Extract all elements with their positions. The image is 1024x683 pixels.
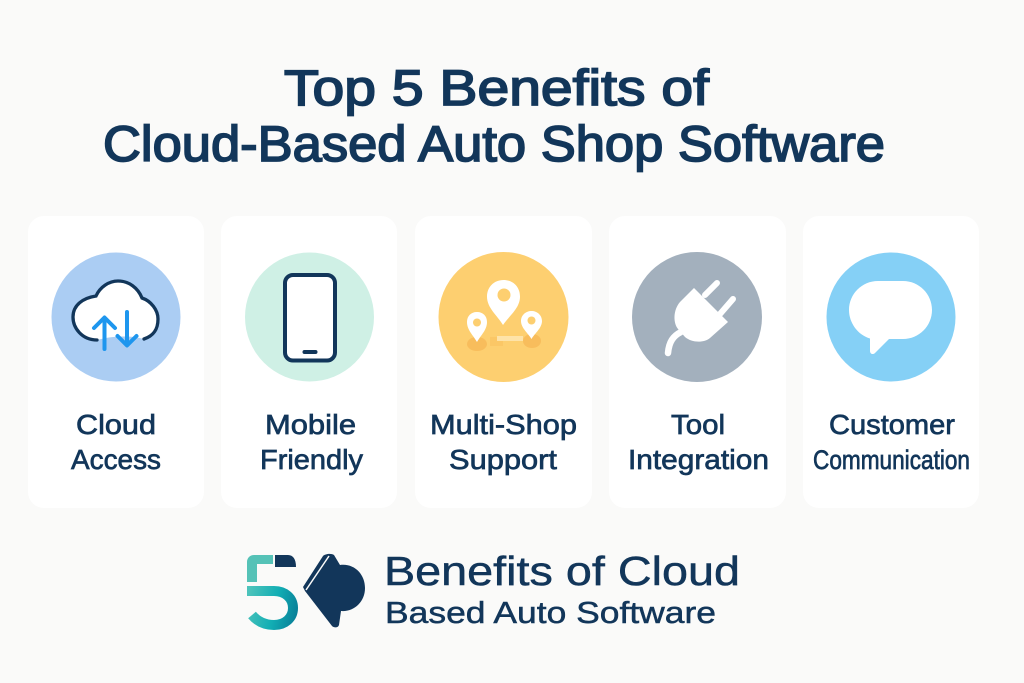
footer logo bbox=[247, 554, 365, 627]
icon: speech bubble bbox=[826, 252, 956, 382]
title bbox=[103, 60, 885, 172]
label: multi-shop support: Support bbox=[449, 444, 557, 475]
footer text: Benefits of Cloud bbox=[384, 548, 740, 594]
footer text: Based Auto Software bbox=[385, 595, 716, 630]
label: tool integration: Integration bbox=[628, 444, 769, 475]
label: cloud access bbox=[71, 409, 161, 475]
label: mobile friendly bbox=[260, 409, 363, 475]
label: mobile friendly: Mobile bbox=[265, 409, 356, 440]
label: cloud access: Access bbox=[71, 444, 161, 475]
panel: multi-shop support bbox=[415, 216, 592, 508]
label: cloud access: Cloud bbox=[76, 409, 156, 440]
label: multi-shop support bbox=[430, 409, 577, 475]
icon: cloud with arrows bbox=[52, 252, 180, 382]
panel: mobile friendly bbox=[221, 216, 397, 508]
icon: navy arrow hand bbox=[303, 554, 365, 627]
label: customer communication bbox=[813, 409, 970, 475]
icon: smartphone bbox=[245, 252, 374, 382]
icon: location pins bbox=[438, 252, 568, 382]
label: customer communication: Communication bbox=[813, 445, 970, 475]
title: Top 5 Benefits of bbox=[284, 60, 709, 116]
footer text bbox=[384, 548, 740, 630]
title: Cloud-Based Auto Shop Software bbox=[103, 116, 885, 172]
icon: plug bbox=[632, 252, 762, 382]
panel: customer communication bbox=[803, 216, 979, 508]
icon: teal five bbox=[247, 555, 296, 625]
label: tool integration: Tool bbox=[671, 409, 725, 440]
label: mobile friendly: Friendly bbox=[260, 444, 363, 475]
label: customer communication: Customer bbox=[829, 409, 955, 440]
panel: cloud access bbox=[28, 216, 204, 508]
panel: tool integration bbox=[609, 216, 786, 508]
label: multi-shop support: Multi-Shop bbox=[430, 409, 577, 440]
label: tool integration bbox=[628, 409, 769, 475]
